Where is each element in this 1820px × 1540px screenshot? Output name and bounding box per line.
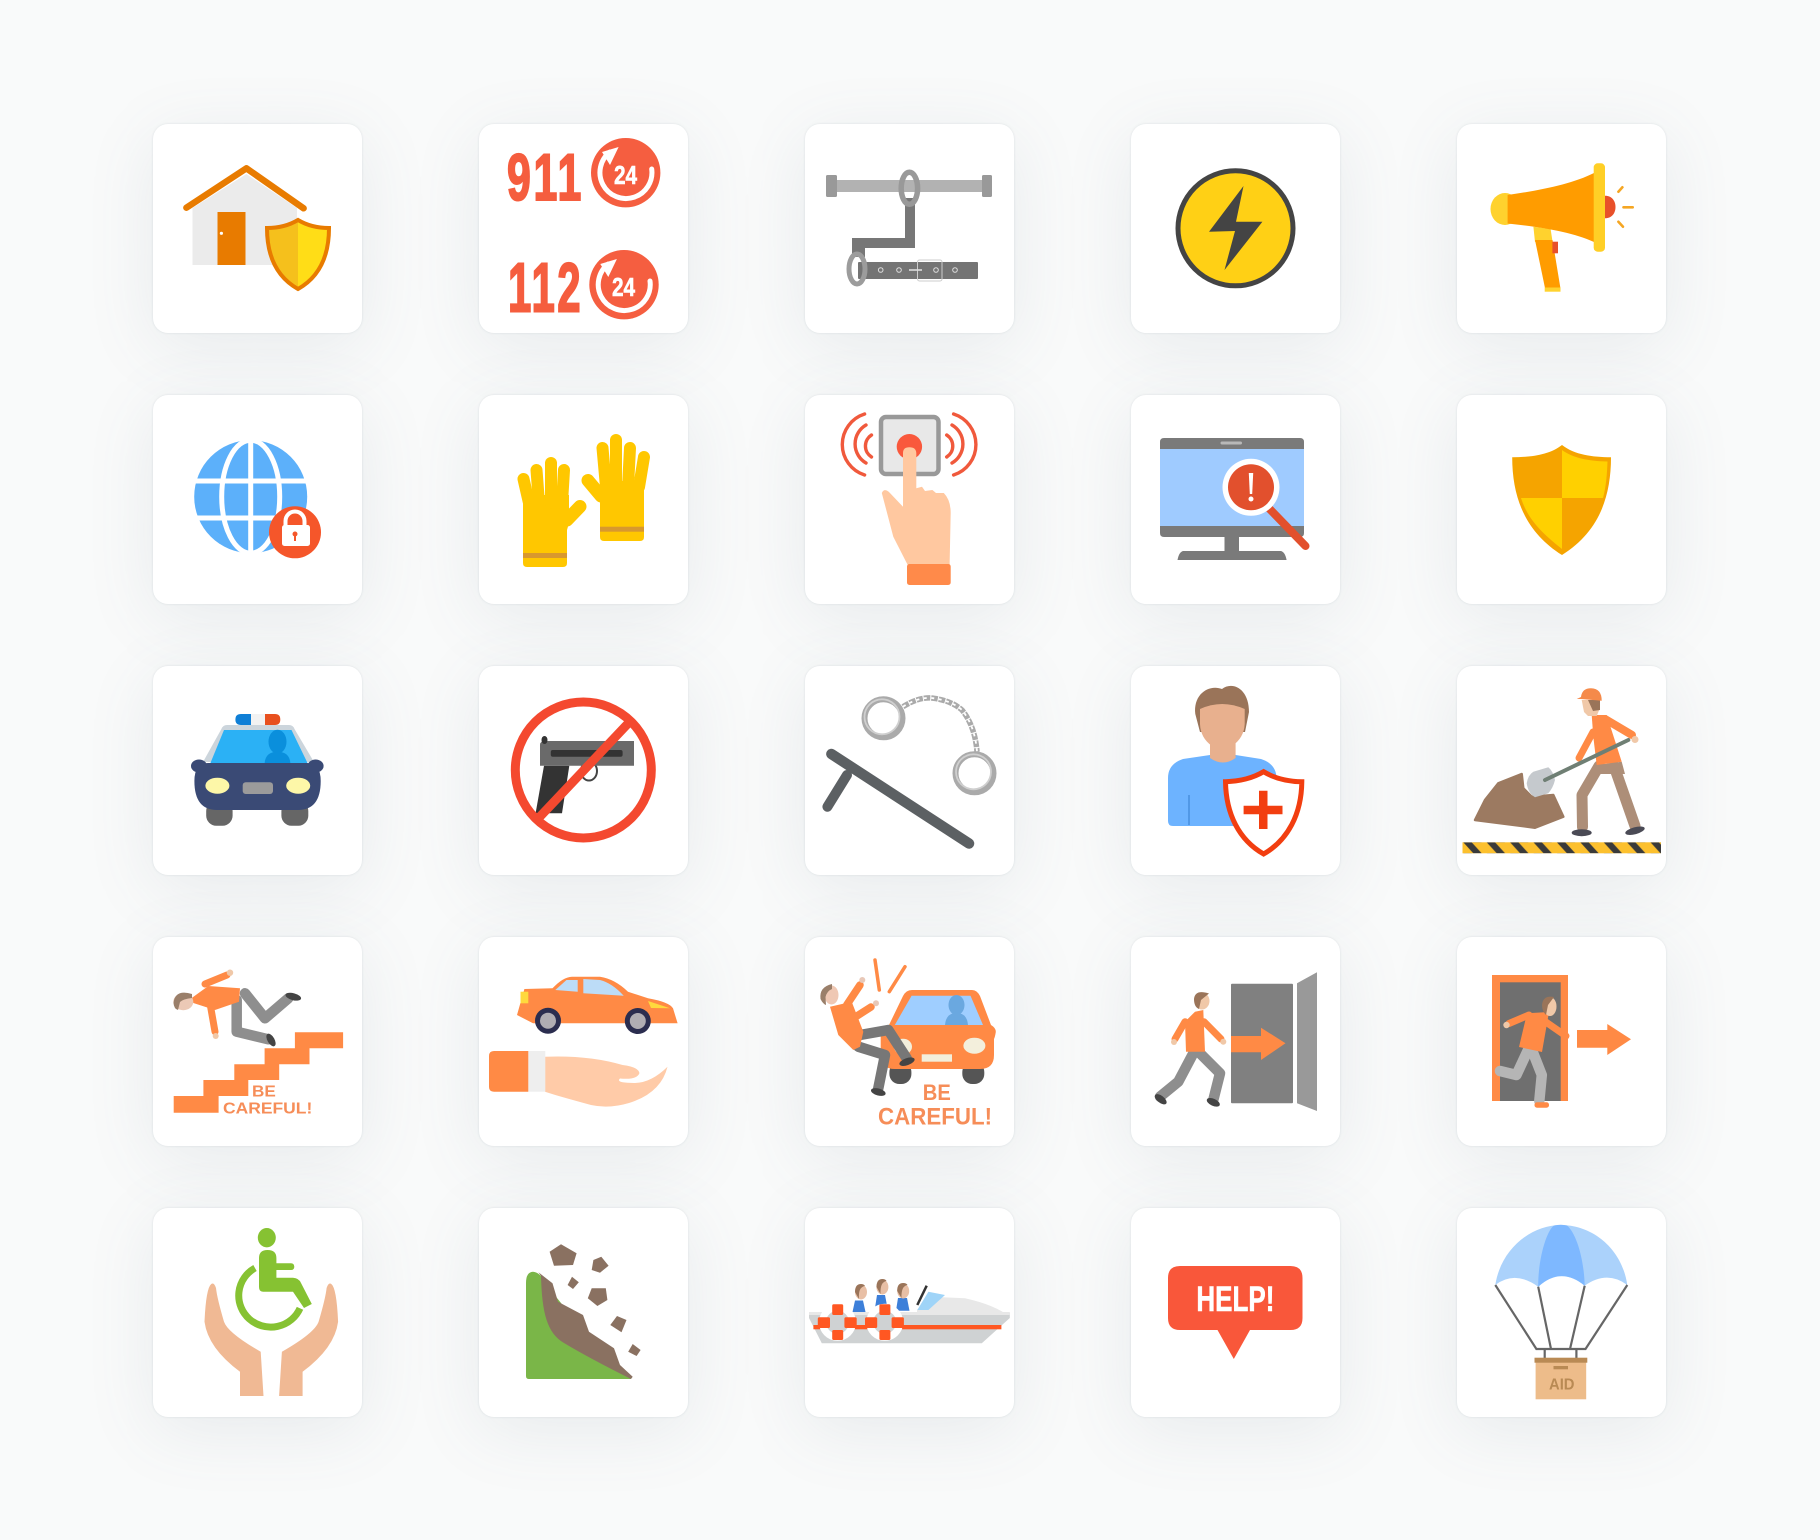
arrow: into door: [1231, 1028, 1286, 1060]
panel: rescue boat: [805, 1208, 1014, 1417]
panel: handcuffs and baton: [805, 666, 1014, 875]
icon: struck man: [820, 977, 916, 1097]
icon: dirt pile: [1475, 774, 1563, 828]
icon: car: [881, 990, 996, 1084]
icon: quartered shield: [1512, 445, 1611, 555]
icon: lifebuoys: [818, 1304, 904, 1340]
panel: shield: [1457, 395, 1666, 604]
panel: megaphone: [1457, 124, 1666, 333]
icon: bar and ring: [826, 172, 992, 257]
panel: entering door: [1131, 937, 1340, 1146]
panel: alarm button: [805, 395, 1014, 604]
panel: monitor alert: [1131, 395, 1340, 604]
icon: pressing hand: [882, 447, 951, 585]
icon: handcuffs: [864, 698, 994, 792]
icon: siren: [235, 714, 280, 725]
icon: belt: [849, 254, 978, 284]
panel: car insurance: [479, 937, 688, 1146]
icon: aid box: [1534, 1358, 1587, 1399]
icon: caring hands: [204, 1284, 338, 1396]
panel: landslide: [479, 1208, 688, 1417]
icon: 24 hour badge: 24: [612, 273, 635, 302]
icon: monitor: [1160, 438, 1304, 560]
icon: prohibition sign: [515, 702, 651, 838]
text: be careful: [223, 1084, 312, 1117]
icon: signal waves: [842, 414, 976, 475]
icon: walking man: [1153, 992, 1226, 1108]
panel: car accident warning: [805, 937, 1014, 1146]
icon: wheelchair: [239, 1228, 312, 1327]
text: be careful: [878, 1080, 992, 1130]
icon: open hand: [489, 1051, 668, 1107]
icon: baton: [827, 754, 969, 844]
icon: house: [186, 168, 304, 265]
arrow: exit: [1577, 1024, 1631, 1055]
icon: parachute cords: [1495, 1285, 1627, 1358]
panel: disability care: [153, 1208, 362, 1417]
icon: open door: [1231, 972, 1317, 1111]
panel: digging worker: [1457, 666, 1666, 875]
icon: hazard stripe: [1462, 842, 1661, 853]
panel: emergency numbers: [479, 124, 688, 333]
icon: stairs: [174, 1032, 343, 1113]
icon: right glove: [588, 440, 644, 541]
panel: globe lock: [153, 395, 362, 604]
icon: padlock: [269, 506, 321, 558]
text: 112: 112: [508, 250, 583, 327]
panel: police car: [153, 666, 362, 875]
icon: globe: [193, 439, 308, 553]
icon: left glove: [523, 463, 580, 567]
panel: help bubble: [1131, 1208, 1340, 1417]
icon: shovel: [1527, 740, 1628, 797]
panel: aid parachute: [1457, 1208, 1666, 1417]
icon: boat hull: [809, 1286, 1010, 1343]
icon: brown scree: [538, 1272, 633, 1379]
icon: parachute canopy: [1495, 1225, 1627, 1287]
icon: police car: [191, 725, 324, 826]
icon: speech bubble: [1168, 1266, 1302, 1359]
icon: pistol: [536, 736, 634, 813]
text: be careful: BE: [923, 1080, 951, 1105]
icon: door frame: [1492, 975, 1568, 1101]
icon: falling rocks: [550, 1244, 641, 1356]
text: be careful: BE: [252, 1084, 276, 1101]
icon: passengers: [852, 1279, 910, 1312]
panel: protected person: [1131, 666, 1340, 875]
panel: electric hazard: [1131, 124, 1340, 333]
text: help: HELP!: [1196, 1280, 1274, 1319]
icon: green slope: [526, 1272, 631, 1379]
icon: shield: [267, 220, 329, 289]
text: be careful: CAREFUL!: [878, 1103, 992, 1130]
icon: impact lines: [875, 960, 905, 992]
icon: 24 hour badge: [591, 138, 660, 207]
icon: car: [517, 977, 678, 1034]
panel: no guns: [479, 666, 688, 875]
panel: restraint belt: [805, 124, 1014, 333]
panel: home protection: [153, 124, 362, 333]
panel: safety gloves: [479, 395, 688, 604]
icon: 24 hour badge: 24: [614, 161, 637, 190]
icon: magnifier: [1222, 459, 1306, 546]
panel: stairs fall warning: [153, 937, 362, 1146]
icon: falling man: [173, 970, 302, 1048]
icon: worker: [1572, 688, 1646, 837]
panel: exit door: [1457, 937, 1666, 1146]
icon: lightning badge: [1178, 171, 1293, 286]
text: be careful: CAREFUL!: [223, 1100, 312, 1117]
icon: 24 hour badge: [589, 250, 659, 319]
icon: medical shield: [1226, 772, 1302, 854]
icon: alarm button: [881, 417, 938, 474]
text: 911: 911: [507, 141, 584, 214]
icon: running man: [1500, 997, 1566, 1108]
icon: aid box: AID: [1549, 1376, 1574, 1393]
icon: megaphone: [1490, 163, 1633, 292]
icon: man: [1168, 686, 1276, 826]
